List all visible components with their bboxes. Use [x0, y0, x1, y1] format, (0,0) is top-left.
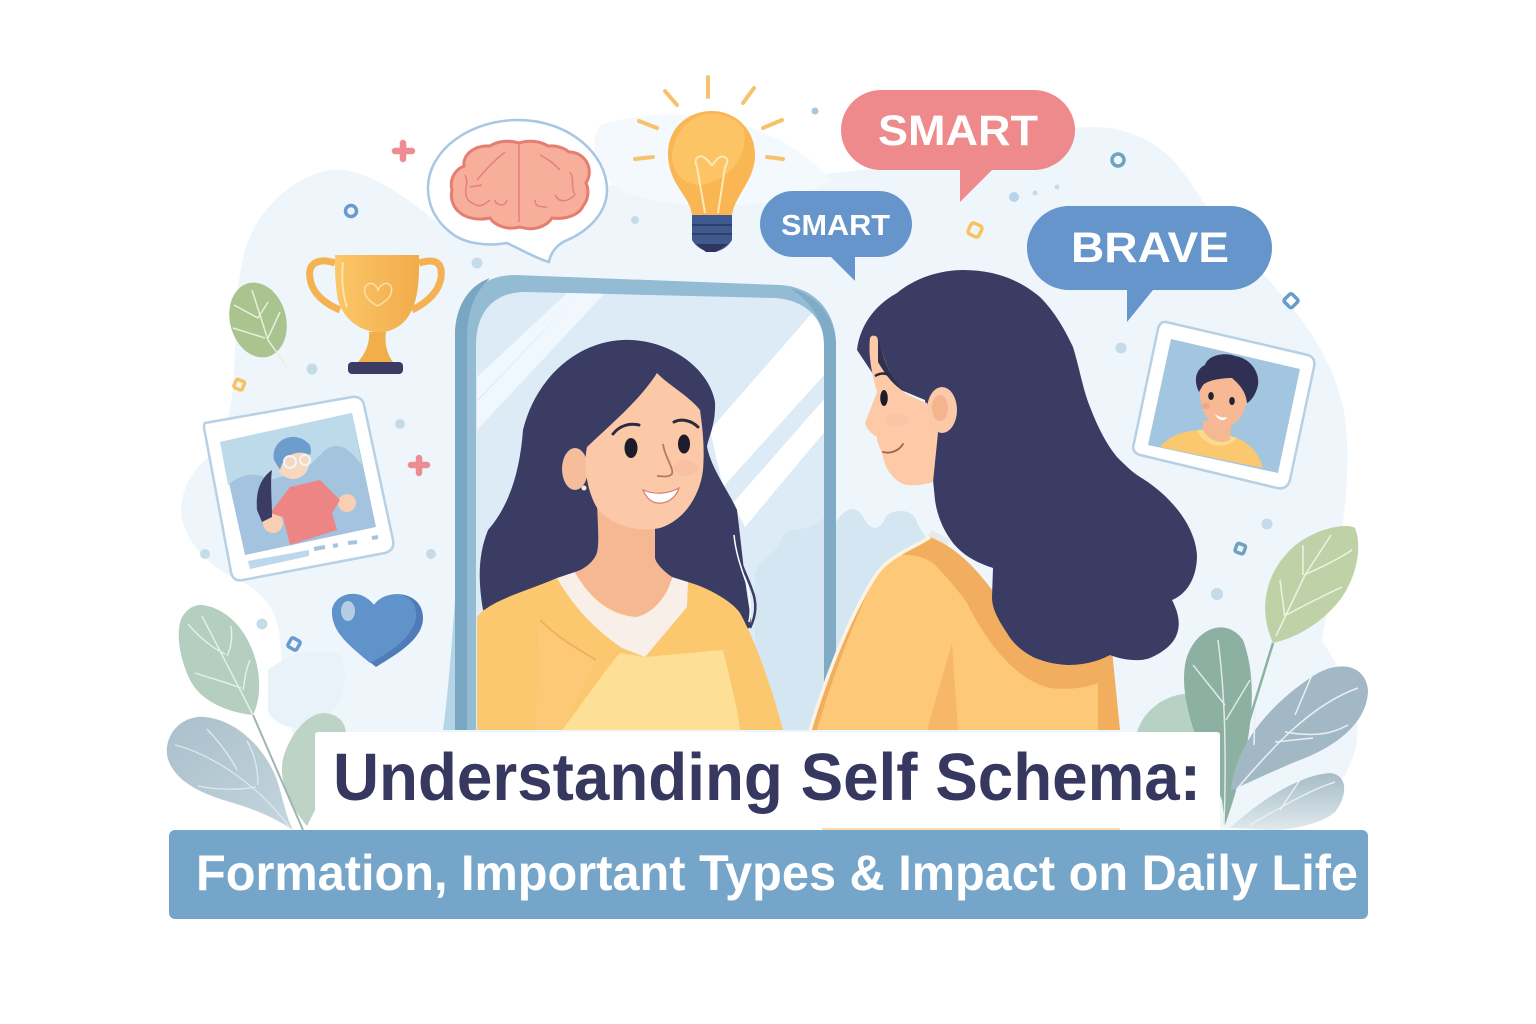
- speech bubble: pink SMART: SMART: [878, 107, 1038, 155]
- leaf: dark green: [1184, 627, 1252, 825]
- mirror frame: [455, 275, 836, 730]
- bulb base: [692, 215, 732, 252]
- back-view woman: [810, 270, 1197, 730]
- woman face: [865, 336, 938, 485]
- woman smile: [883, 444, 903, 453]
- hair strand highlight: [735, 535, 755, 628]
- sweater folds: [535, 620, 596, 730]
- title panel: [315, 732, 1220, 831]
- brain: [451, 141, 589, 229]
- woman sweater fold: [927, 643, 958, 730]
- card shirt: [1160, 430, 1263, 468]
- speech bubble: blue SMART: SMART: [781, 210, 890, 242]
- card photo background: [220, 413, 376, 555]
- mirrored smile: [643, 488, 679, 503]
- mirrored nose: [657, 444, 672, 476]
- woman ear: [927, 387, 957, 433]
- card face: [1200, 372, 1248, 427]
- photo card: right: [1133, 322, 1314, 488]
- leaf: grey blue: [1231, 666, 1368, 790]
- plant: left leaves: [167, 605, 346, 830]
- leaf: pale green side: [282, 713, 346, 826]
- mirror flare: [443, 590, 456, 730]
- trophy handles: [310, 261, 441, 310]
- mirrored sweater: [477, 578, 783, 730]
- background cloud behind woman: [830, 509, 926, 660]
- card hair: [1196, 354, 1258, 403]
- woman sweater light area: [817, 555, 1098, 730]
- speech bubble: BRAVE: [1027, 206, 1272, 322]
- woman eye: [880, 390, 888, 406]
- mirrored neck: [575, 503, 672, 617]
- card person: [338, 494, 356, 512]
- title: Understanding Self Schema:: [333, 740, 1201, 815]
- card neck: [1203, 420, 1231, 442]
- speech bubble: pink SMART: [841, 90, 1075, 202]
- woman collar: [925, 530, 950, 552]
- bulb rays: [635, 77, 783, 159]
- faded leaf shapes: [268, 651, 345, 728]
- mirror: [443, 275, 836, 730]
- card controls: [248, 550, 309, 569]
- mirror reflections: [477, 293, 824, 527]
- trophy cup: [335, 255, 419, 333]
- mirrored face: [585, 373, 704, 529]
- collar: [557, 572, 688, 657]
- brows and eyes: [613, 420, 698, 434]
- bulb glass: [668, 111, 755, 215]
- icon: green leaf: [221, 276, 295, 367]
- mirrored ear: [562, 448, 588, 490]
- mirrored woman: [477, 340, 783, 730]
- sweater sliver behind subtitle: [822, 828, 1120, 831]
- decorative dots and sparkles: [200, 108, 1299, 651]
- leaf stem: [253, 715, 303, 830]
- mirrored hair: [480, 340, 751, 640]
- speech bubble: BRAVE: BRAVE: [1071, 224, 1229, 272]
- plant: right leaves: [1137, 526, 1368, 830]
- bulb filament: [696, 156, 727, 213]
- woman hair: [857, 270, 1197, 665]
- trophy base: [348, 362, 403, 374]
- icon: brain thought bubble: [428, 120, 607, 262]
- photo card: left: [204, 397, 393, 580]
- subtitle: Formation, Important Types & Impact on Daily Life: [196, 845, 1358, 901]
- sweater light panel: [562, 650, 740, 730]
- icon: heart: [332, 594, 423, 667]
- background cloud accent: [594, 114, 830, 206]
- leaf: faded bottom: [1230, 773, 1344, 830]
- icon: light bulb: [635, 77, 783, 252]
- woman fringe: [878, 338, 905, 392]
- leaf: sage upper: [1265, 526, 1358, 643]
- subtitle banner: [169, 830, 1368, 919]
- speech bubble: blue SMART: [760, 191, 912, 281]
- woman sweater: [810, 537, 1120, 730]
- card photo background: [1148, 339, 1300, 473]
- leaf: pale green upper: [179, 605, 259, 715]
- background blob: [181, 127, 1358, 830]
- mirror glass: [476, 292, 824, 730]
- leaf: pale bottom: [1137, 694, 1222, 732]
- icon: trophy: [310, 255, 441, 374]
- infographic illustration: [166, 75, 1368, 919]
- leaf: grey blue lower: [167, 717, 293, 830]
